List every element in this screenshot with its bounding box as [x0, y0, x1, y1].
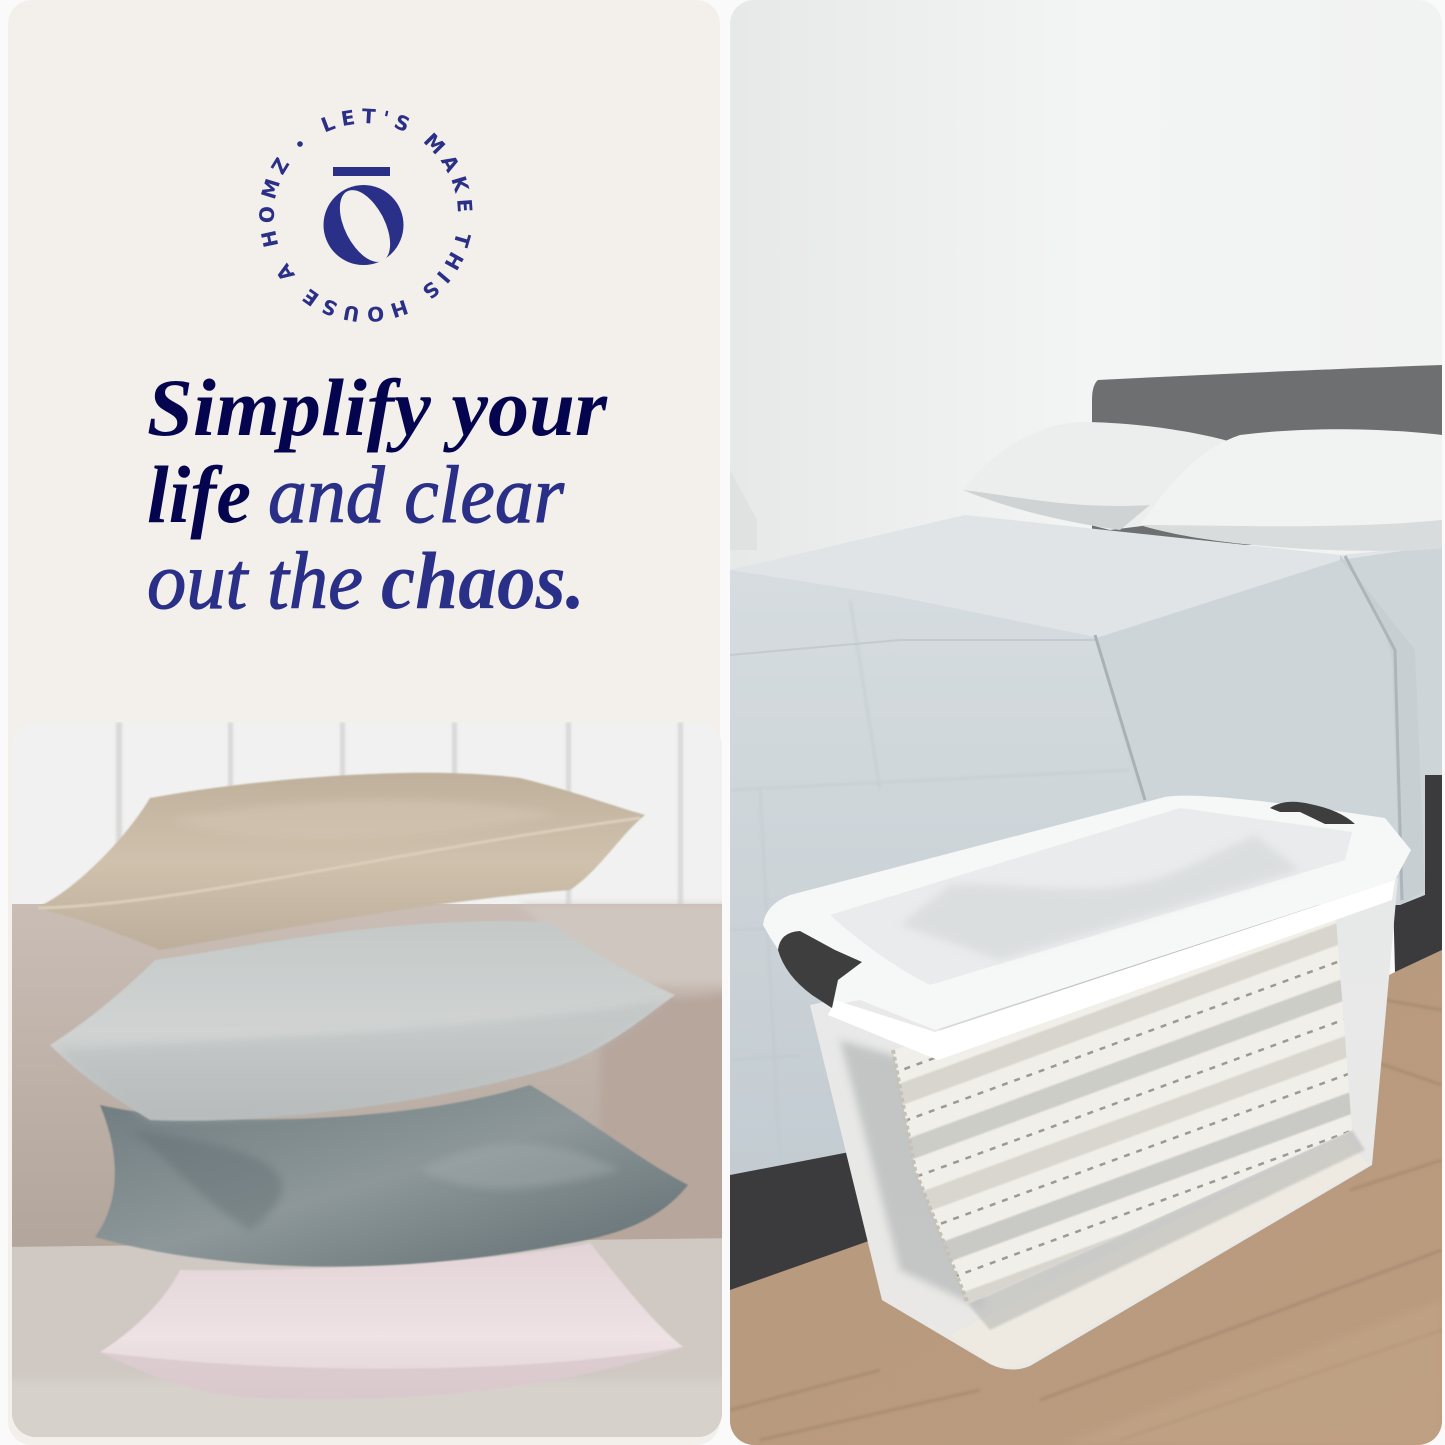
pillow: dark slate: [95, 1085, 688, 1267]
photo panel: stack of four pillows on a sofa: [0, 722, 740, 1445]
handle: left latch: [778, 931, 862, 1008]
lid: [763, 796, 1411, 1030]
storage bin: [763, 796, 1411, 1370]
striped blanket: [894, 920, 1352, 1304]
blanket fringe: [893, 1050, 968, 1304]
folded blanket at the bottom: [950, 1135, 1368, 1367]
bed pillows: [963, 422, 1442, 551]
heading: Simplify your life and clear out the chaos: Simplify your: [147, 362, 608, 453]
bin body: [810, 878, 1398, 1370]
duvet front: [730, 570, 1145, 1175]
bed base: [730, 775, 1442, 1290]
interior shadow: [840, 1040, 985, 1310]
handle: right latch: [1270, 802, 1355, 824]
headboard: [1092, 365, 1442, 545]
logo mark: macron bar and letter o: [324, 167, 404, 270]
heading: Simplify your life and clear out the chaos: [147, 362, 608, 626]
paneled wall background: [115, 722, 722, 904]
pillow: pink: [100, 1243, 683, 1399]
heading: Simplify your life and clear out the chaos: out the: [147, 535, 363, 626]
wood floor: [730, 950, 1442, 1445]
bed top surface and foldover sheet: [730, 515, 1442, 905]
small side object: [730, 470, 757, 550]
panel: left beige text panel: [8, 0, 720, 1445]
heading: Simplify your life and clear out the chaos: chaos.: [381, 535, 585, 626]
pillow: beige linen: [35, 773, 645, 950]
heading: Simplify your life and clear out the chaos: and clear: [268, 449, 565, 540]
logo: circular brand badge: [259, 108, 472, 322]
lid center panel: [830, 808, 1352, 985]
lid front rim: [828, 880, 1395, 1060]
photo panel: bedroom with clear storage bin: [730, 0, 1442, 1445]
wall: [730, 0, 1442, 570]
heading: Simplify your life and clear out the chaos: life: [147, 449, 251, 540]
pillow: light grey: [50, 921, 675, 1121]
logo ring text: LET'S MAKE THIS HOUSE A HOMZ: [259, 108, 472, 322]
frosted front overlay: [892, 919, 1349, 1302]
sofa: [0, 904, 740, 1445]
